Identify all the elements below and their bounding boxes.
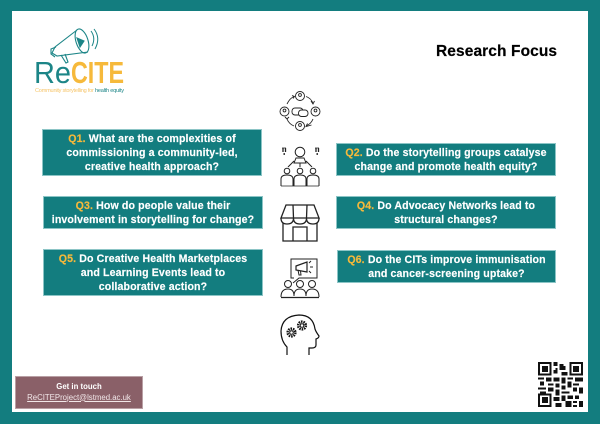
question 3 bbox=[43, 196, 263, 229]
question 4: structural changes? bbox=[394, 214, 498, 226]
question 5: Q5. Do Creative Health Marketplaces bbox=[59, 252, 247, 264]
icon: group with leader bbox=[280, 146, 320, 186]
question 4 bbox=[336, 196, 556, 229]
icon: market stall bbox=[280, 204, 320, 242]
title: Research Focus bbox=[436, 43, 557, 60]
contact email: ReCITEProject@lstmed.ac.uk bbox=[27, 392, 131, 402]
wordmark: Re bbox=[34, 55, 71, 90]
question 5: and Learning Events lead to bbox=[81, 266, 225, 278]
tagline: Community storytelling for health equity bbox=[35, 88, 124, 94]
question 6 bbox=[337, 250, 556, 283]
question 1: commissioning a community-led, bbox=[66, 146, 238, 158]
icon: presentation audience bbox=[280, 258, 320, 298]
icon: discussion circle bbox=[280, 91, 320, 131]
logo: ReCITE bbox=[34, 28, 124, 94]
question 3: involvement in storytelling for change? bbox=[52, 214, 254, 226]
question 2 bbox=[336, 143, 556, 176]
question 1: creative health approach? bbox=[85, 160, 219, 172]
question 5 bbox=[43, 249, 263, 296]
question 3: Q3. How do people value their bbox=[76, 200, 230, 212]
icon: megaphone bbox=[51, 27, 98, 63]
question 1: Q1. What are the complexities of bbox=[68, 132, 236, 144]
question 2: Q2. Do the storytelling groups catalyse bbox=[345, 146, 547, 158]
question 4: Q4. Do Advocacy Networks lead to bbox=[357, 200, 535, 212]
contact heading: Get in touch bbox=[56, 382, 102, 391]
question 2: change and promote health equity? bbox=[355, 160, 537, 172]
question 6: and cancer-screening uptake? bbox=[368, 268, 525, 280]
question 5: collaborative action? bbox=[99, 280, 207, 292]
QR code bbox=[538, 362, 583, 407]
icon: head with gears bbox=[280, 314, 320, 355]
question 6: Q6. Do the CITs improve immunisation bbox=[347, 254, 546, 266]
contact box bbox=[15, 376, 143, 409]
logo: ReCITE: CITE bbox=[71, 55, 124, 90]
question 1 bbox=[42, 129, 262, 176]
